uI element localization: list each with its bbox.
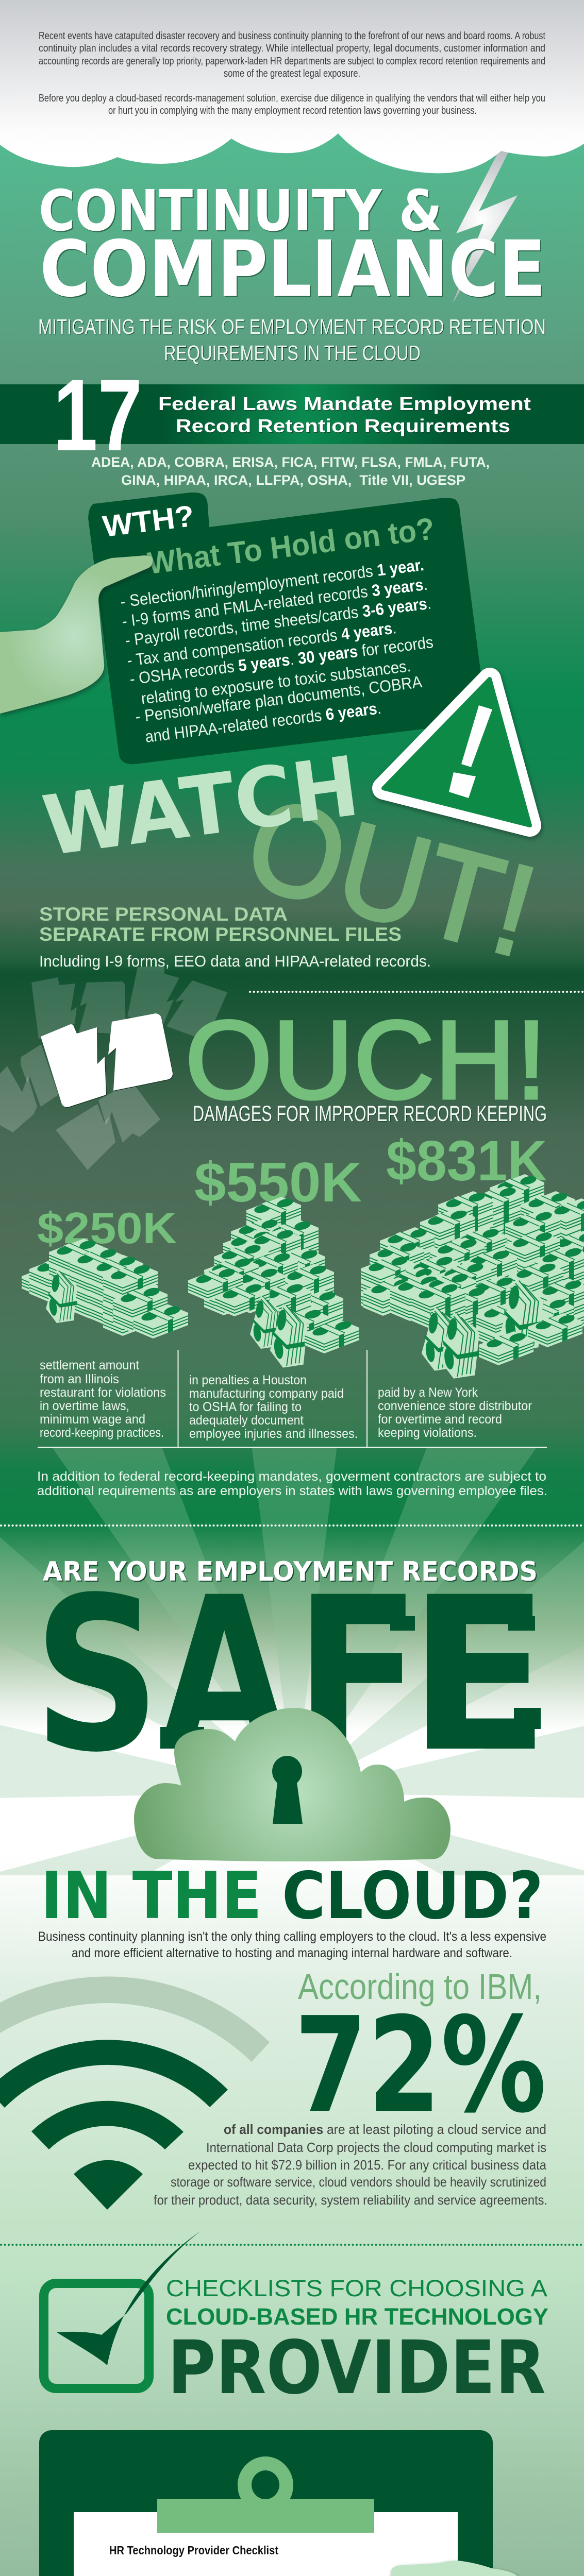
banner heading [158, 393, 531, 436]
what to hold on to heading: What To Hold on to? [145, 511, 436, 581]
money pile 250K [22, 1239, 188, 1338]
safe: E [408, 1552, 550, 1799]
in the cloud heading: CLOUD? [282, 1858, 543, 1934]
banner heading: Record Retention Requirements [176, 415, 510, 436]
caption: 550K: adequately document [189, 1413, 304, 1428]
panel: what to hold on to [88, 493, 487, 764]
caption: 831K: for overtime and record [378, 1412, 502, 1427]
are your employment records: ARE YOUR EMPLOYMENT RECORDS [43, 1556, 538, 1587]
caption: 831K: keeping violations. [378, 1426, 477, 1440]
caption: 250K: record-keeping practices. [40, 1426, 164, 1440]
watch out heading: WATCH [38, 738, 364, 875]
caption: 550K: employee injuries and illnesses. [189, 1427, 358, 1441]
store personal data text: SEPARATE FROM PERSONNEL FILES [39, 924, 402, 945]
checklist heading: PROVIDER [168, 2325, 546, 2411]
retention list [119, 555, 434, 746]
caption: 831K: convenience store distributor [378, 1399, 532, 1413]
clipboard [39, 2430, 493, 2576]
lightning bolt [453, 147, 518, 303]
title: CONTINUITY & [39, 178, 442, 244]
icon: wifi signal [0, 1976, 270, 2210]
store personal data text: STORE PERSONAL DATA [39, 904, 288, 925]
caption: 550K: to OSHA for failing to [189, 1400, 302, 1414]
ouch heading: OUCH! [185, 997, 547, 1122]
icon: torn documents [0, 966, 227, 1170]
icon: warning triangle [383, 679, 530, 825]
government contractors note: In addition to federal record-keeping mandates, goverment contractors are subject to [37, 1469, 546, 1484]
caption: 250K: restaurant for violations [40, 1385, 166, 1400]
amount: 250K: $250K [37, 1204, 177, 1253]
icon: cloud with keyhole [134, 1708, 450, 1861]
caption: 831K: paid by a New York [378, 1385, 478, 1400]
money pile 550K [188, 1197, 359, 1368]
safe: S [34, 1552, 160, 1799]
caption: 550K [189, 1373, 358, 1441]
caption: 250K: in overtime laws, [40, 1399, 129, 1413]
retention list: - Pension/welfare plan documents, COBRA [134, 672, 423, 726]
store personal data text [39, 904, 431, 970]
intro text [39, 30, 545, 116]
checklist heading: CHECKLISTS FOR CHOOSING A [166, 2275, 547, 2301]
government contractors note [37, 1469, 547, 1498]
caption: 550K: in penalties a Houston [189, 1373, 307, 1387]
title [39, 178, 546, 314]
number 17: 17 [53, 358, 142, 472]
caption: 831K [378, 1385, 532, 1440]
checklist heading [166, 2275, 548, 2411]
list of laws: GINA, HIPAA, IRCA, LLFPA, OSHA, Title VII, UGESP [121, 472, 465, 488]
watch out heading [38, 738, 549, 984]
icon: checkbox with checkmark [44, 2231, 201, 2388]
WTH?: WTH? [101, 499, 196, 544]
IBM paragraph: for their product, data security, system reliability and service agreements. [154, 2192, 547, 2208]
IBM paragraph: International Data Corp projects the cloud computing market is [206, 2140, 546, 2155]
checklist heading: CLOUD-BASED HR TECHNOLOGY [166, 2303, 548, 2330]
caption: 250K [40, 1358, 166, 1440]
store personal data text: Including I-9 forms, EEO data and HIPAA-related records. [39, 952, 431, 970]
safe [34, 1552, 550, 1799]
retention list: - Tax and compensation records 4 years. [126, 618, 397, 670]
IBM paragraph: expected to hit $72.9 billion in 2015. For any critical business data [188, 2157, 546, 2173]
caption: 250K: from an Illinois [40, 1372, 119, 1386]
subtitle [38, 315, 546, 365]
icon: pointing hand [0, 555, 153, 714]
checklist one heading: HR Technology Provider Checklist [109, 2544, 278, 2557]
retention list: - I-9 forms and FMLA-related records 3 years. [121, 574, 428, 631]
banner heading: Federal Laws Mandate Employment [158, 393, 531, 414]
list of laws [91, 454, 490, 488]
storm cloud header [0, 0, 584, 173]
in the cloud heading [41, 1858, 543, 1934]
retention list: - Selection/hiring/employment records 1 year. [119, 555, 425, 611]
money pile 831K [361, 1174, 584, 1379]
retention list: relating to exposure to toxic substances. [140, 656, 412, 708]
intro text: or hurt you in complying with the many employment record retention laws governing your business. [108, 105, 477, 116]
icon: hand holding clipboard [391, 2561, 584, 2576]
cloud paragraph: and more efficient alternative to hosting and managing internal hardware and software. [72, 1946, 512, 1960]
IBM paragraph: of all companies are at least piloting a cloud service and [224, 2122, 546, 2137]
amount: 550K: $550K [194, 1151, 362, 1214]
retention list: - OSHA records 5 years. 30 years for records [128, 633, 434, 688]
caption: 550K: manufacturing company paid [189, 1386, 344, 1401]
cloud paragraph [38, 1929, 546, 1960]
safe: A [159, 1552, 290, 1799]
caption: 250K: minimum wage and [40, 1412, 145, 1427]
sunburst rays [0, 1448, 584, 1875]
banner: 17 federal laws [0, 358, 584, 472]
watch out heading: OUT! [233, 770, 549, 984]
in the cloud heading: IN THE [41, 1858, 262, 1934]
retention list: - Payroll records, time sheets/cards 3-6 years. [124, 594, 432, 650]
paper [74, 2512, 458, 2576]
government contractors note: additional requirements as are employers in states with laws governing employee files. [37, 1484, 547, 1498]
clip [157, 2456, 374, 2533]
safe: F [294, 1552, 421, 1799]
caption: 250K: settlement amount [40, 1358, 139, 1372]
intro text: some of the greatest legal exposure. [224, 68, 360, 79]
subtitle: REQUIREMENTS IN THE CLOUD [164, 341, 421, 365]
retention list: and HIPAA-related records 6 years. [144, 699, 382, 746]
list of laws: ADEA, ADA, COBRA, ERISA, FICA, FITW, FLSA, FMLA, FUTA, [91, 454, 490, 470]
according to IBM: According to IBM, [298, 1967, 542, 2007]
IBM paragraph [154, 2122, 547, 2208]
amount: 831K: $831K [386, 1129, 547, 1193]
